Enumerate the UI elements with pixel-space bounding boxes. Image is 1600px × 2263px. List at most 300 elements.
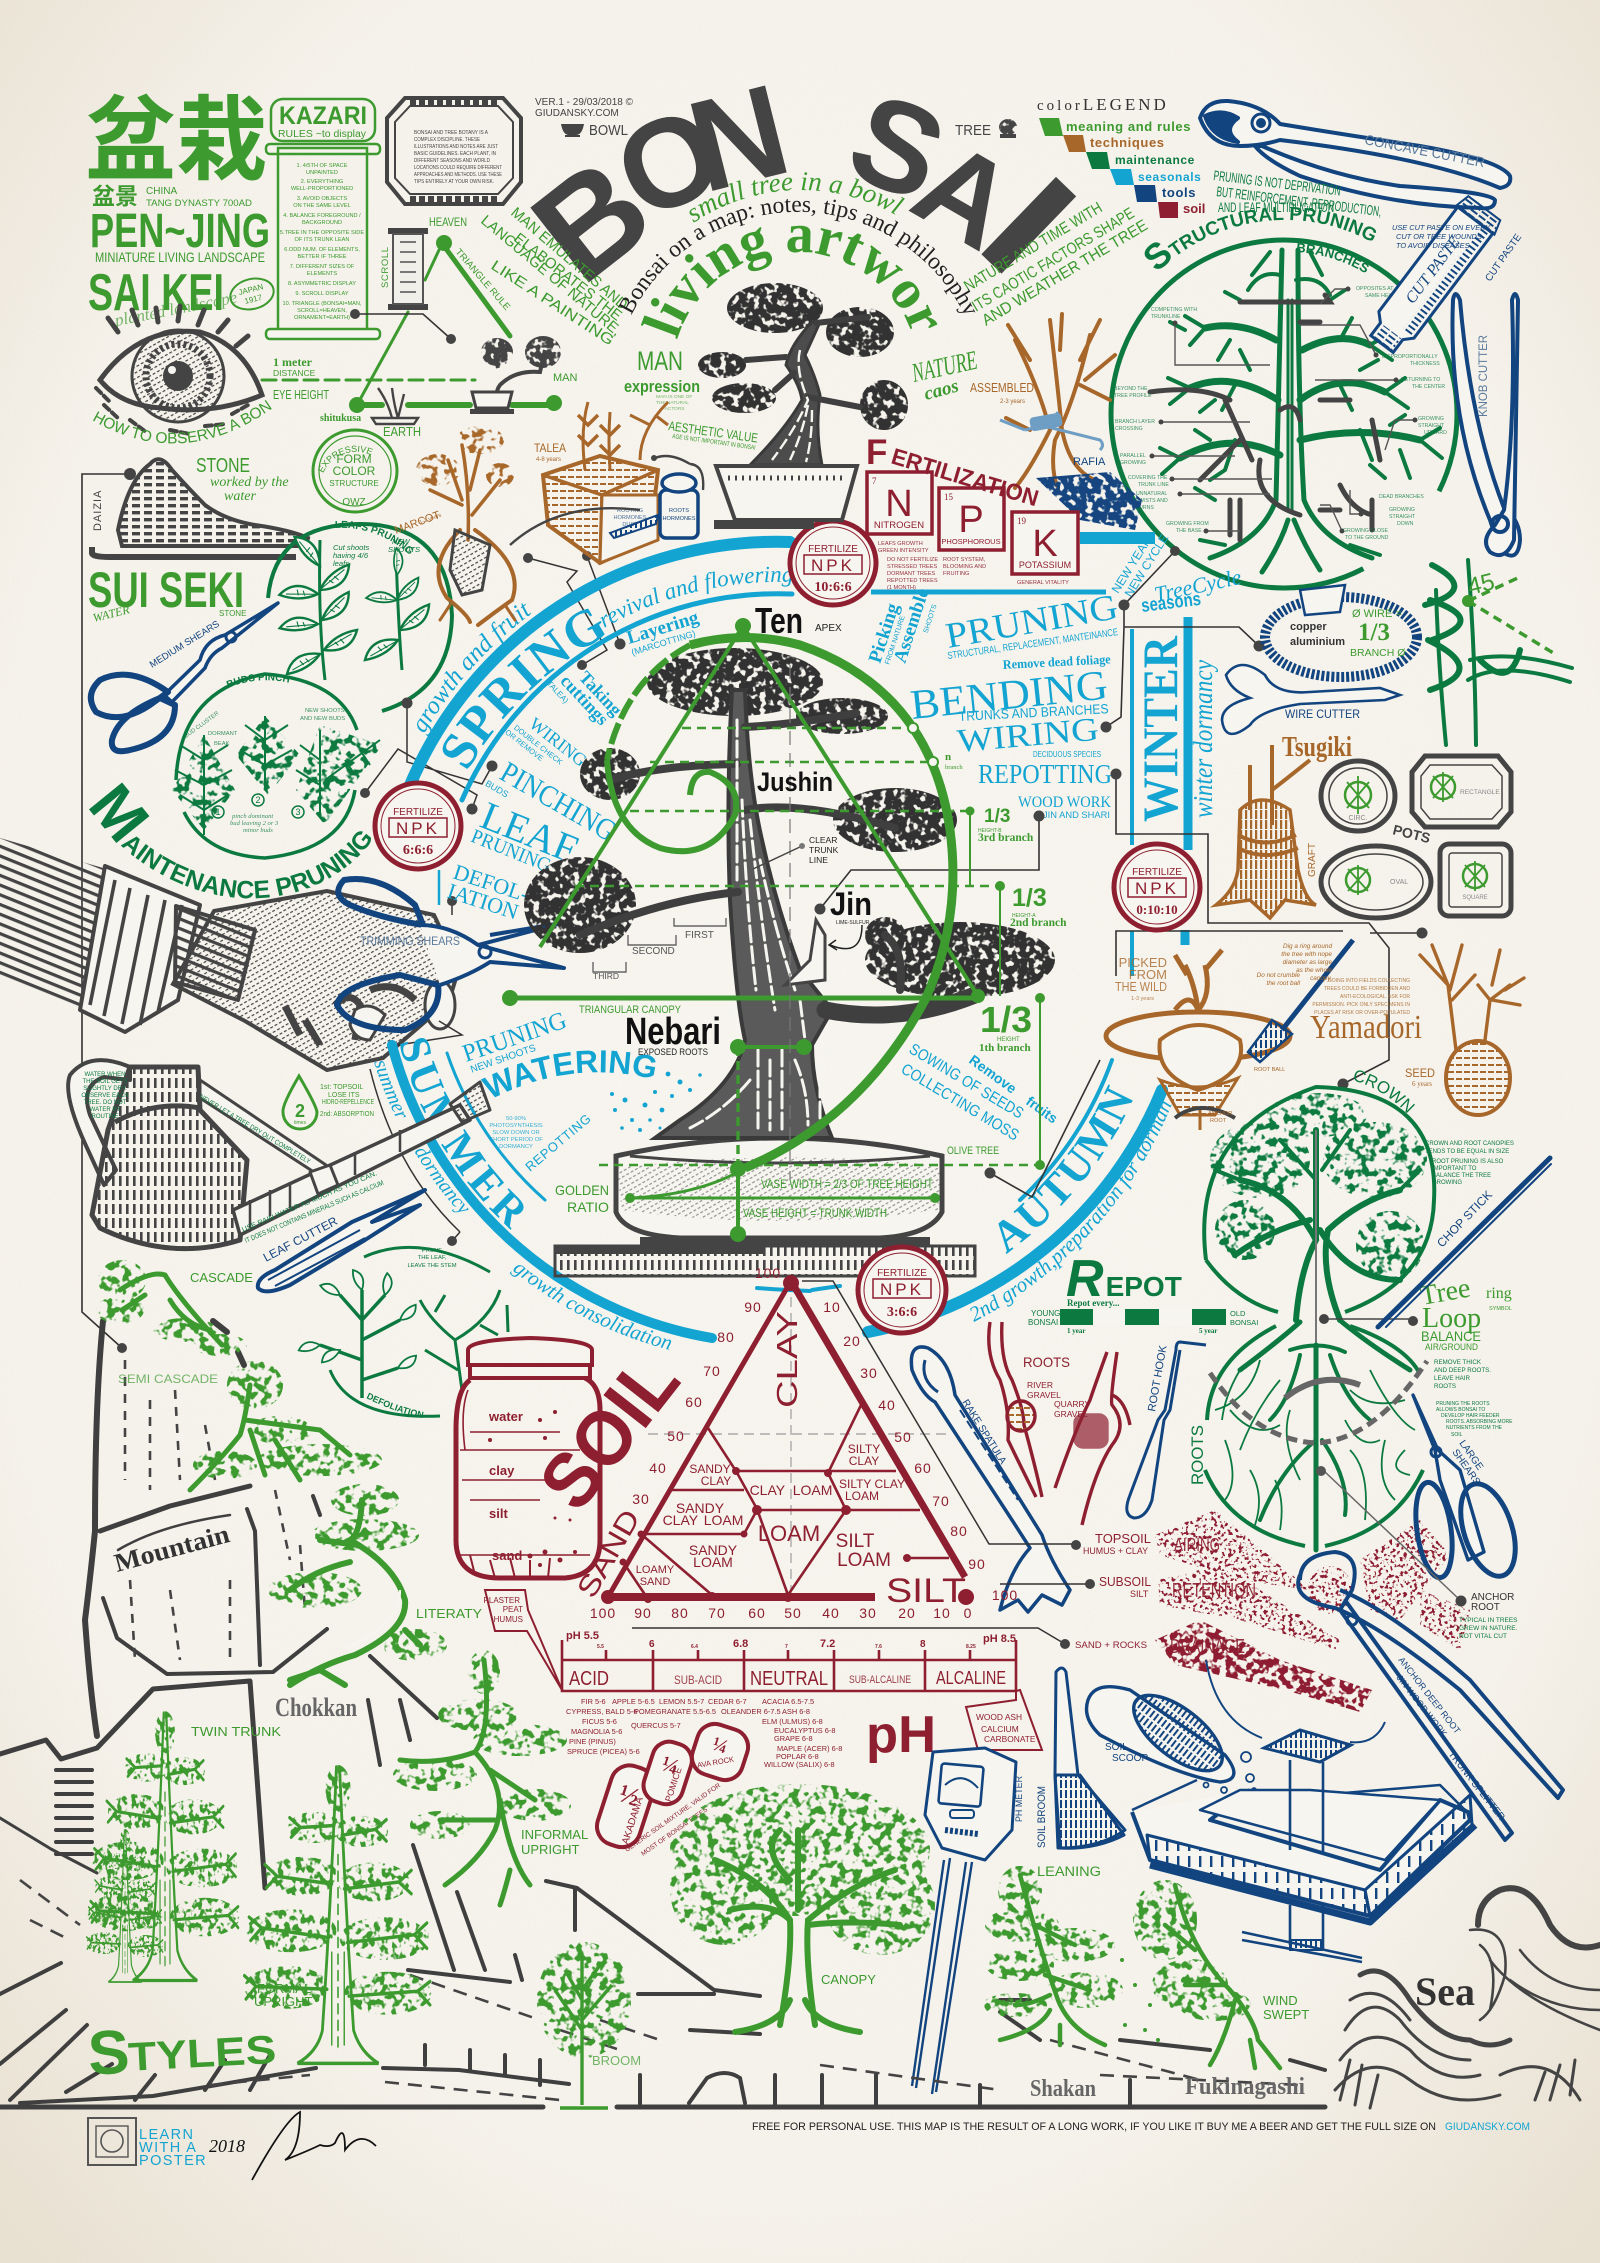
icon: wire coil bbox=[1265, 585, 1417, 677]
heading: crown: CROWN bbox=[1351, 1066, 1418, 1117]
upper bonsai branches bbox=[746, 317, 868, 407]
text: bonsai hunting notes bbox=[1312, 978, 1410, 1016]
words: airing retention drainage: RETENTION bbox=[1172, 1580, 1256, 1602]
text: bar labels: BONSAI bbox=[1230, 1318, 1258, 1327]
text: picked from the wild: THE WILD bbox=[1115, 979, 1167, 994]
upper bonsai foliage bbox=[698, 283, 908, 430]
label: broom: BROOM bbox=[592, 2053, 641, 2068]
soil classes: LOAM bbox=[845, 1489, 879, 1503]
bar: repot frequency bbox=[1060, 1309, 1226, 1325]
icon: earth plant bbox=[372, 388, 418, 424]
connector dots and notes: DISPROPORTIONALLY bbox=[1382, 354, 1438, 360]
labels: canopy and pot rules: GOLDEN bbox=[555, 1182, 609, 1198]
pot: oval bbox=[1321, 846, 1431, 918]
tree style: informal upright bbox=[393, 1650, 571, 1905]
panel: propagation techniques bbox=[393, 314, 1142, 625]
speckles: drainage bbox=[1155, 1620, 1372, 1712]
spring tasks bbox=[444, 607, 704, 926]
text: use cut paste: CUT OR TREE WOUNDS bbox=[1396, 232, 1482, 241]
text: npk effects: BLOOMING AND bbox=[943, 564, 986, 570]
title: BON SAI: O bbox=[596, 78, 742, 247]
panel: soil triangle bbox=[571, 1265, 1018, 1621]
text: bud notes: DORMANT bbox=[208, 731, 238, 737]
summer tasks: REPOTTING bbox=[522, 1111, 594, 1174]
text: bar labels: YOUNG bbox=[1031, 1309, 1060, 1318]
summer tasks bbox=[459, 1007, 660, 1174]
scroll with ten rules: 3. AVOID OBJECTS bbox=[297, 196, 347, 202]
heading box: kazari: KAZARI bbox=[279, 102, 367, 130]
label: cut paste: CUT PASTE bbox=[1483, 232, 1524, 284]
text: npk effects: (1 MONTH) bbox=[887, 585, 916, 591]
icon: grafted stump bbox=[1216, 745, 1316, 918]
crown circle bbox=[1204, 1087, 1434, 1312]
tree style: broom bbox=[537, 1942, 631, 2108]
stamp: fertilize 3 6 6: NPK bbox=[880, 1280, 924, 1299]
stamp: expressive form color: FORM bbox=[336, 452, 372, 466]
labels: soil layers: HUMUS + CLAY bbox=[1083, 1546, 1148, 1556]
text: bud notes bbox=[184, 708, 345, 834]
circle arc bbox=[176, 674, 357, 858]
tree loop text: Tree bbox=[1418, 1273, 1473, 1312]
tree ph list: EUCALYPTUS 6-8 bbox=[774, 1726, 835, 1735]
icon: cut paste tube: CUT PASTE bbox=[1403, 234, 1464, 307]
text: bonsai hunting notes: PLACES AT RISK OR OVER-POPULATED bbox=[1314, 1010, 1410, 1016]
icon: marcot wrap bbox=[450, 530, 490, 595]
label: wind swept: WIND bbox=[1263, 1993, 1298, 2008]
labels: soil layers: SAND + ROCKS bbox=[1075, 1640, 1147, 1651]
step numbers: 1 bbox=[215, 807, 221, 817]
text: bonsai hunting notes: ANTI-ECOLOGICAL. ASK FOR bbox=[1340, 994, 1410, 1000]
connector dots and notes bbox=[1114, 286, 1447, 541]
axis numbers: 20 bbox=[843, 1333, 861, 1349]
label: chokkan: Chokkan bbox=[275, 1693, 357, 1722]
connector dots and notes: TURNS bbox=[1136, 505, 1154, 511]
tree ph list: WILLOW (SALIX) 6-8 bbox=[764, 1760, 835, 1769]
text: remove thick roots: ROOTS. ABSORBING MORE bbox=[1446, 1419, 1513, 1425]
text: triangle labels: shitukusa bbox=[320, 413, 361, 424]
text: man emulates nature: LANGUAGE OF NATURE, bbox=[477, 212, 625, 339]
pot: square: SQUARE bbox=[1462, 895, 1488, 901]
text: roots labels: GRAVEL bbox=[1054, 1409, 1088, 1419]
text: picked from the wild bbox=[1115, 955, 1167, 1002]
icon and text: rafia: RAFIA bbox=[1073, 456, 1106, 468]
axis numbers: 90 bbox=[634, 1605, 652, 1621]
panel: tsugiki graft bbox=[1216, 732, 1352, 918]
scroll with ten rules: 6.ODD NUM. OF ELEMENTS, bbox=[284, 247, 360, 253]
icon: soil scoop bbox=[1086, 1681, 1235, 1785]
trunk highlights bbox=[690, 720, 820, 1130]
text: bonsai hunting notes: PERMISSION. PICK ONLY SPECIMENS IN bbox=[1312, 1002, 1410, 1008]
labels: small black: APEX bbox=[815, 623, 842, 634]
spring tasks: WIRING bbox=[526, 713, 591, 770]
label: graft: GRAFT bbox=[1306, 842, 1318, 877]
axis numbers: 0 bbox=[964, 1605, 972, 1621]
panel: potting tools bbox=[0, 1260, 1600, 2180]
text: man emulates nature: ELABORATES THE bbox=[511, 230, 625, 324]
tab: wood ash: WOOD ASH bbox=[976, 1712, 1022, 1722]
winter tasks: NEW CYCLE bbox=[1122, 532, 1171, 600]
axis numbers: 70 bbox=[708, 1605, 726, 1621]
triangle lines bbox=[262, 246, 554, 405]
triangle frame bbox=[608, 1281, 965, 1597]
icon: seedling and pine cone bbox=[1420, 945, 1524, 1115]
panel: seasons ring bbox=[0, 0, 1428, 1355]
labels: small black: LIME-SULFUR bbox=[836, 920, 870, 926]
mix: akadama: AKADAMA bbox=[620, 1796, 646, 1846]
panel: structural pruning bbox=[1111, 204, 1457, 588]
panel: fertilization npk bbox=[866, 433, 1078, 591]
text: aesthetic value: AGE IS NOT IMPORTANT IN BONSAI bbox=[672, 433, 756, 452]
labels: japanese tree parts: Ten bbox=[755, 600, 803, 641]
icon: marcot plant bbox=[416, 426, 515, 625]
scroll with ten rules: ORNAMENT=EARTH) bbox=[294, 315, 350, 321]
text: watering notes: WATER WHEN bbox=[84, 1072, 126, 1078]
text: man emulates nature: MAN EMULATES AND bbox=[507, 204, 631, 313]
text: soil scoop: SCOOP bbox=[1112, 1753, 1148, 1764]
text: aesthetic value: AESTHETIC VALUE bbox=[668, 418, 759, 446]
text: bud notes: BEAK bbox=[214, 741, 230, 747]
winter tasks: BENDING bbox=[908, 663, 1110, 729]
icon: tree label bbox=[955, 119, 1017, 139]
panel: disclaimer frame: COMPLEX DISCIPLINE. THESE bbox=[414, 137, 480, 143]
stamp: fertilize 6 6 6 bbox=[375, 783, 461, 869]
tree ph list: CYPRESS, BALD 5-6 bbox=[566, 1707, 637, 1716]
winter tasks: REPOTTING bbox=[978, 759, 1112, 789]
connector dots and notes: GROWING CLOSE bbox=[1343, 528, 1389, 534]
summer labels: summer bbox=[374, 1061, 406, 1118]
label: shakan: Shakan bbox=[1030, 2076, 1096, 2102]
soil classes: CLAY LOAM bbox=[750, 1482, 832, 1498]
icon: red root right bbox=[1055, 1352, 1130, 1525]
panel: soil mix bbox=[592, 1719, 753, 1858]
jar labels: sand bbox=[492, 1548, 522, 1563]
connector dots and notes: THE BASE bbox=[1176, 528, 1202, 534]
soil classes: SILTY bbox=[848, 1442, 880, 1456]
text: stone water: STONE bbox=[219, 609, 246, 618]
connector dots and notes: THE CENTER bbox=[1412, 384, 1445, 390]
icon: red root left bbox=[989, 1322, 1042, 1497]
tree ph list: POMEGRANATE 5.5-6.5 bbox=[634, 1707, 716, 1716]
text: npk effects: DORMANT TREES bbox=[887, 571, 936, 577]
scale labels: ACID bbox=[569, 1668, 609, 1690]
scroll with ten rules: 2. EVERYTHING bbox=[301, 179, 343, 185]
green nodes bbox=[502, 618, 1045, 1242]
tree style: leaning bbox=[983, 1866, 1123, 2045]
label: mountain: Mountain bbox=[111, 1519, 233, 1578]
stamp: japan 1917: JAPAN bbox=[238, 282, 264, 297]
tree loop text: Loop bbox=[1422, 1303, 1481, 1334]
text: nature caos: NATURE bbox=[908, 345, 980, 388]
element: phosphorous: P bbox=[958, 499, 984, 541]
text: roots labels bbox=[1023, 1354, 1091, 1419]
scroll with ten rules: 8. ASYMMETRIC DISPLAY bbox=[288, 281, 356, 287]
stamp: japan 1917 bbox=[227, 274, 277, 314]
heading: sai kei: SAI KEI bbox=[88, 264, 224, 322]
scroll with ten rules: UNPAINTED bbox=[306, 170, 338, 176]
stamp: fertilize 0 10 10 bbox=[1114, 844, 1200, 930]
heading: branches: BRANCHES bbox=[1297, 243, 1369, 272]
text: generic soil mixture: MOST OF BONSAI TREES bbox=[640, 1806, 710, 1858]
tool label: RAKE SPATULA bbox=[959, 1398, 1008, 1467]
tree loop text: ring bbox=[1486, 1285, 1512, 1302]
labels: ramification: THIRD bbox=[593, 971, 619, 981]
spring tasks: BUDS bbox=[484, 778, 510, 799]
text: picked from the wild: FROM bbox=[1129, 967, 1167, 982]
tree loop text bbox=[1418, 1273, 1512, 1352]
text: wire branch ratio bbox=[1350, 608, 1405, 659]
text: rain water: USE RAIN WATER AS MUCH AS YOU CAN. bbox=[241, 1170, 378, 1234]
element: nitrogen: NITROGEN bbox=[874, 520, 924, 531]
tree style: canopy bbox=[670, 1784, 935, 2032]
triangular canopy lines bbox=[510, 626, 1040, 1234]
connector dots and notes: OPPOSITES AT bbox=[1356, 286, 1394, 292]
spring tasks: DEFOL- bbox=[450, 859, 533, 907]
text: dig notes bbox=[1257, 943, 1332, 987]
text: stone worked by water: STONE bbox=[196, 455, 250, 477]
connector dots and notes: UNNATURAL bbox=[1136, 491, 1167, 497]
label: informal upright bbox=[521, 1827, 588, 1857]
text: use cut paste: TO AVOID DISEASES bbox=[1396, 241, 1470, 250]
spring labels: SPRING bbox=[442, 608, 605, 769]
element: nitrogen: 7 bbox=[872, 476, 877, 486]
summer labels: growth consolidation bbox=[510, 1265, 672, 1350]
heading: pen-jing: PEN~JING bbox=[90, 205, 270, 258]
text: miniature living landscape: MINIATURE LIVING LANDSCAPE bbox=[95, 249, 265, 265]
panel: crown and roots balance bbox=[1188, 1066, 1551, 1550]
labels: thirds: 2nd branch bbox=[1010, 917, 1067, 929]
text: man expression: MAN IS ONE OF bbox=[656, 394, 692, 400]
text: npk effects: STRESSED TREES bbox=[887, 564, 938, 570]
mix: pomice bbox=[639, 1737, 696, 1809]
soil classes: SANDY bbox=[689, 1462, 731, 1476]
autumn labels: 2nd growth,preparation for dormancy bbox=[970, 1102, 1172, 1322]
text: watering notes: ROUTINE bbox=[92, 1114, 118, 1120]
scale labels: SUB-ALCALINE bbox=[849, 1674, 911, 1686]
tool label: ROOT HOOK bbox=[1146, 1344, 1170, 1413]
heading: roots: ROOTS bbox=[1188, 1425, 1207, 1485]
labels: japanese tree parts: Jushin bbox=[757, 767, 833, 797]
soil classes: LOAM bbox=[837, 1550, 891, 1571]
text: root ball and anchor: ANCHOR bbox=[1208, 1111, 1232, 1117]
panel: disclaimer frame: TIPS ENTIRELY AT YOUR OWN RISK. bbox=[414, 179, 494, 185]
labels: canopy and pot rules: VASE HEIGHT = TRUNK WIDTH bbox=[743, 1206, 887, 1220]
tab: wood ash: CALCIUM bbox=[981, 1724, 1019, 1734]
illustration: sea waves bbox=[1335, 1888, 1600, 2108]
soil classes: LOAM bbox=[758, 1521, 820, 1546]
labels: soil layers: TOPSOIL bbox=[1095, 1531, 1151, 1546]
text: man expression: MAN bbox=[637, 346, 683, 376]
clear trunk pointer and jin arrow bbox=[753, 843, 862, 950]
icon: bowl label bbox=[561, 122, 628, 139]
mix: akadama bbox=[592, 1760, 659, 1852]
icon: wire cutter bbox=[1222, 665, 1400, 734]
text: rooting hormones note: DUST bbox=[622, 522, 638, 528]
connector dots and notes: GROWING FROM bbox=[1166, 521, 1209, 527]
text: crown note: CROWN AND ROOT CANOPIES bbox=[1425, 1141, 1514, 1147]
text: planted landscape: planted landscape bbox=[112, 287, 239, 330]
text: bar labels: 1 year bbox=[1067, 1327, 1085, 1335]
tree ph list: SPRUCE (PICEA) 5-6 bbox=[567, 1747, 640, 1756]
icon: bowl label: BOWL bbox=[589, 122, 628, 139]
tab: plaster peat humus: PLASTER bbox=[484, 1596, 520, 1605]
labels: thirds: n bbox=[945, 751, 951, 763]
connector dots and notes: BRANCH LAYER bbox=[1115, 419, 1155, 425]
panel: disclaimer frame: BONSAI AND TREE BOTANY IS A bbox=[414, 130, 488, 136]
heading: soil: SOIL bbox=[522, 1337, 696, 1525]
labels: thirds: 1th branch bbox=[979, 1042, 1031, 1054]
tool label: CHOP STICK bbox=[1434, 1188, 1495, 1250]
text: watering notes bbox=[81, 1072, 129, 1120]
scale numbers: 7 bbox=[785, 1644, 788, 1650]
connector dots and notes: SAME HEIGHT bbox=[1365, 293, 1402, 299]
panel: disclaimer frame bbox=[387, 98, 521, 204]
speckles: retention bbox=[1158, 1565, 1470, 1650]
tree ph list: FICUS 5-6 bbox=[582, 1717, 617, 1726]
pot: circular bbox=[1321, 761, 1395, 831]
tool label: KNOB CUTTER bbox=[1476, 335, 1490, 417]
tree ph list bbox=[566, 1697, 842, 1769]
scale numbers: 6.8 bbox=[733, 1638, 748, 1650]
spring tasks: (MARCOTTING) bbox=[630, 628, 697, 657]
text: nature and time: NATURE AND TIME WITH bbox=[961, 199, 1105, 295]
text: bud notes: NEW SHOOTS bbox=[305, 708, 345, 714]
crown trunk branches bbox=[1215, 1130, 1420, 1320]
connector dots and notes: PARALLEL bbox=[1120, 453, 1146, 459]
text: npk effects: ROOT SYSTEM, bbox=[943, 557, 986, 563]
element: phosphorous: PHOSPHOROUS bbox=[941, 537, 1001, 546]
text: marcot: MARCOT bbox=[393, 509, 442, 537]
text: remove thick roots: ALLOWS BONSAI TO bbox=[1436, 1407, 1485, 1413]
winter tasks: TreeCycle bbox=[1152, 564, 1244, 607]
scroll with ten rules: OF ITS TRUNK LEAN bbox=[295, 237, 349, 243]
label: formal upright: FORMAL bbox=[257, 1981, 311, 1996]
panel: soil layers bbox=[1075, 1510, 1470, 1712]
axis numbers: 10 bbox=[823, 1299, 841, 1315]
text: crown note bbox=[1425, 1141, 1514, 1186]
axis numbers: 50 bbox=[667, 1428, 685, 1444]
connectors winter side bbox=[820, 551, 1422, 1197]
axis numbers: 80 bbox=[950, 1523, 968, 1539]
axis numbers: 70 bbox=[932, 1493, 950, 1509]
stamp: fertilize 6 6 6: NPK bbox=[396, 819, 440, 838]
tree on root ball bbox=[1106, 950, 1290, 1130]
text: water twice bbox=[320, 1084, 374, 1118]
text: dig notes: Do not crumble bbox=[1257, 972, 1300, 979]
label: formal upright bbox=[254, 1981, 313, 2009]
title: BON SAI: S bbox=[831, 65, 963, 230]
element: phosphorous bbox=[939, 488, 1004, 550]
connector dots and notes: TRUNK LINE bbox=[1138, 482, 1169, 488]
text: picked from the wild: PICKED bbox=[1119, 955, 1167, 970]
mix: lava rock: LAVA ROCK bbox=[692, 1755, 735, 1771]
panel: wire bbox=[1222, 560, 1572, 745]
heading box: kazari: RULES ~to display bbox=[278, 129, 366, 140]
scale labels: ALCALINE bbox=[936, 1668, 1006, 1688]
label: literaty: LITERATY bbox=[416, 1606, 482, 1621]
footer: learn with a poster bbox=[139, 2127, 207, 2169]
summer tasks: SHORT PERIOD OF bbox=[489, 1137, 543, 1143]
stamp: fertilize 3 6 6 bbox=[858, 1247, 946, 1333]
heading: penjing kanji and origin bbox=[92, 183, 252, 209]
jar labels: water bbox=[488, 1409, 523, 1424]
heading: defoliation: DEFOLIATION bbox=[366, 1392, 424, 1418]
icon: soil broom bbox=[1055, 1668, 1125, 1848]
jar labels: clay bbox=[489, 1463, 515, 1478]
text: bud notes: BUD CLUSTER bbox=[184, 711, 220, 740]
text: prune the leaf: THE LEAF, bbox=[418, 1255, 447, 1261]
legend title: colorLEGEND bbox=[1037, 95, 1169, 114]
text: roots labels: ROOTS bbox=[1023, 1354, 1070, 1370]
heading: pots: POTS bbox=[1391, 821, 1432, 846]
text: anchor root bbox=[1459, 1592, 1518, 1640]
text: triangle labels: SCROLL bbox=[380, 246, 391, 288]
text: prune the leaf bbox=[407, 1248, 457, 1269]
winter tasks: DECIDUOUS SPECIES bbox=[1033, 750, 1101, 759]
text: leaf notes: SHOOTS bbox=[388, 545, 420, 554]
tree style: cascade bbox=[96, 1260, 247, 1356]
tree style: twin trunk bbox=[87, 1711, 239, 1982]
label: leaning: LEANING bbox=[1037, 1864, 1101, 1879]
heading: penjing kanji and origin: 盆景 bbox=[92, 183, 138, 209]
tree ph list: CEDAR 6-7 bbox=[708, 1697, 747, 1706]
icon: tree label: TREE bbox=[955, 122, 991, 139]
spring tasks: DOUBLE CHECK bbox=[512, 723, 564, 767]
words: airing retention drainage: DRAINAGE bbox=[1170, 1636, 1245, 1658]
label: canopy: CANOPY bbox=[821, 1972, 876, 1987]
hand bbox=[173, 891, 459, 1070]
text: version and site bbox=[535, 97, 634, 119]
label: wire cutter: WIRE CUTTER bbox=[1285, 707, 1360, 721]
axis numbers: 90 bbox=[968, 1556, 986, 1572]
circle arcs bbox=[330, 1247, 508, 1416]
text: assembled: 2-3 years bbox=[1000, 399, 1025, 405]
panel: watering can bbox=[68, 1060, 490, 1249]
text: bud notes: pinch dominant bbox=[231, 813, 273, 820]
connector dots bbox=[117, 468, 136, 1353]
winter labels bbox=[1132, 635, 1218, 822]
heading: styles: S bbox=[86, 2018, 131, 2089]
connector dots and notes: STRAIGHT bbox=[1389, 514, 1416, 520]
icon: rake spatula bbox=[911, 1347, 1070, 1612]
soil classes: CLAY bbox=[701, 1474, 731, 1488]
axis titles: SILT bbox=[886, 1572, 966, 1610]
text: root ball and anchor: ROOT BALL bbox=[1254, 1067, 1285, 1073]
autumn tasks: SOWING OF SEEDS bbox=[906, 1041, 1026, 1122]
connector bbox=[447, 1232, 460, 1246]
tree loop text: BALANCE bbox=[1421, 1328, 1481, 1344]
connector dots soil layers bbox=[1060, 1540, 1095, 1649]
text: talea bbox=[534, 441, 566, 463]
axis numbers: 100 bbox=[590, 1605, 616, 1621]
scroll with ten rules: 4. BALANCE FOREGROUND / bbox=[283, 213, 361, 219]
labels: ramification bbox=[593, 918, 726, 981]
summer tasks: DORMANCY bbox=[499, 1144, 533, 1150]
grey dead branches bbox=[1150, 295, 1380, 540]
summer labels: dormancy bbox=[415, 1148, 469, 1212]
panel: how to observe bbox=[0, 0, 275, 447]
scroll with ten rules: 5.TREE IN THE OPPOSITE SIDE bbox=[280, 230, 364, 236]
winter tasks: WOOD WORK bbox=[1018, 794, 1111, 811]
circle arc bbox=[268, 524, 452, 711]
text: seed bbox=[1405, 1066, 1435, 1088]
leaf thin rule bbox=[438, 870, 440, 905]
tree style: formal upright bbox=[244, 1765, 432, 2063]
text: anchor root: ROOT bbox=[1471, 1602, 1500, 1613]
legend labels: soil bbox=[1183, 201, 1205, 216]
icon and text: rafia bbox=[1036, 456, 1142, 530]
summer outer curve bbox=[370, 1069, 460, 1232]
tree trunk bbox=[655, 690, 832, 1138]
